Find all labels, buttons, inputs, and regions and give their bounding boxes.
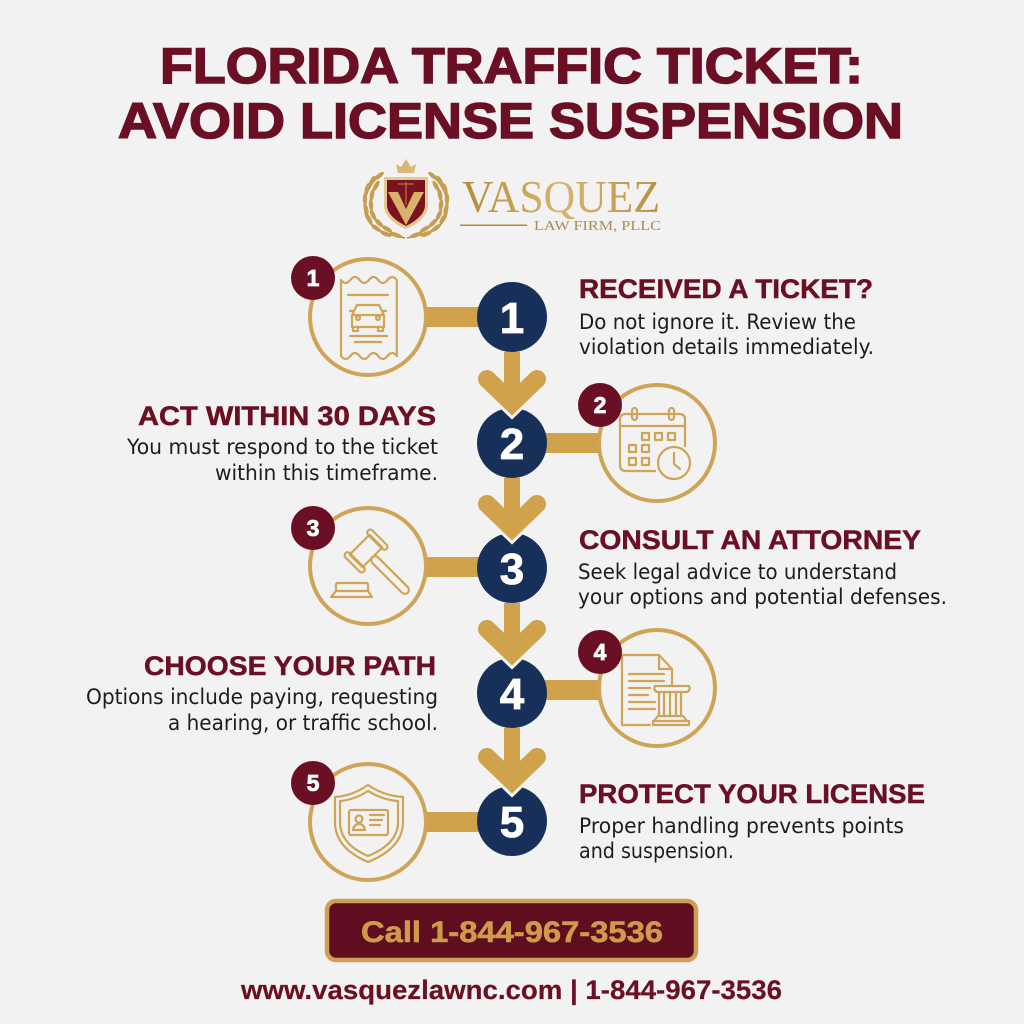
call to action button	[327, 901, 696, 960]
step 3 text	[578, 525, 947, 609]
step 3 text: CONSULT AN ATTORNEY	[579, 525, 921, 555]
step 4 badge	[578, 630, 622, 674]
logo: Vasquez Law Firm	[362, 159, 661, 239]
step 2 text: within this timeframe.	[215, 461, 438, 485]
timeline node 5: 5	[500, 798, 524, 847]
timeline node 1	[477, 282, 547, 352]
timeline node 1: 1	[500, 294, 524, 343]
step 2 text	[126, 401, 438, 485]
step 1 icon: ticket with car	[310, 259, 426, 375]
icon: crest shield	[384, 177, 428, 229]
logo wordmark: VASQUEZ	[462, 172, 660, 222]
step 5 text: Proper handling prevents points	[579, 814, 904, 838]
arrow 4 to 5	[487, 728, 537, 783]
step 1 badge	[291, 256, 335, 300]
arrow 2 to 3	[487, 478, 537, 530]
timeline node 3	[477, 533, 547, 603]
step 1 text: violation details immediately.	[579, 335, 874, 359]
step 3 text: your options and potential defenses.	[578, 585, 947, 609]
timeline node 2: 2	[500, 420, 524, 469]
title: AVOID LICENSE SUSPENSION	[118, 93, 903, 149]
step 2 badge	[578, 383, 622, 427]
connector bars	[424, 307, 600, 832]
timeline node 3: 3	[500, 545, 524, 594]
step 1 text	[579, 274, 874, 359]
step 2 text: ACT WITHIN 30 DAYS	[138, 401, 436, 431]
step 5 icon: shield with ID card	[310, 764, 426, 880]
arrow 3 to 4	[487, 603, 537, 655]
step 4 text: CHOOSE YOUR PATH	[144, 651, 436, 681]
call to action button: Call 1-844-967-3536	[361, 916, 663, 949]
step 3 text: Seek legal advice to understand	[578, 560, 897, 584]
step 2 icon: calendar with clock	[599, 385, 715, 501]
step 3 badge	[291, 506, 335, 550]
footer contact line: www.vasquezlawnc.com | 1-844-967-3536	[240, 975, 782, 1005]
timeline node 4: 4	[500, 670, 525, 719]
step 1 text: RECEIVED A TICKET?	[579, 274, 873, 304]
step 3 icon: gavel	[310, 508, 426, 624]
step 4 text: Options include paying, requesting	[86, 685, 438, 709]
timeline node 4	[477, 658, 547, 728]
timeline node 2	[477, 408, 547, 478]
logo tagline: LAW FIRM, PLLC	[534, 219, 661, 234]
step 5 text: and suspension.	[579, 839, 734, 863]
step 5 text	[579, 779, 925, 863]
step 1 text: Do not ignore it. Review the	[579, 310, 856, 334]
step 4 text: a hearing, or traffic school.	[168, 711, 438, 735]
step 1 badge: 1	[307, 265, 320, 291]
step 4 icon: document with pillar	[599, 630, 715, 746]
step 2 text: You must respond to the ticket	[126, 435, 438, 459]
timeline node 5	[477, 786, 547, 856]
step 4 text	[86, 651, 438, 735]
title: FLORIDA TRAFFIC TICKET:	[160, 38, 863, 94]
step 5 badge: 5	[307, 770, 320, 796]
icon: laurel wreath	[362, 170, 450, 239]
title	[118, 38, 903, 149]
arrow 1 to 2	[487, 352, 537, 405]
icon: crown	[396, 159, 416, 173]
step 5 text: PROTECT YOUR LICENSE	[579, 779, 925, 809]
step 3 badge: 3	[307, 515, 319, 541]
step 5 badge	[291, 761, 335, 805]
step 2 badge: 2	[594, 392, 606, 418]
step 4 badge: 4	[594, 639, 607, 665]
